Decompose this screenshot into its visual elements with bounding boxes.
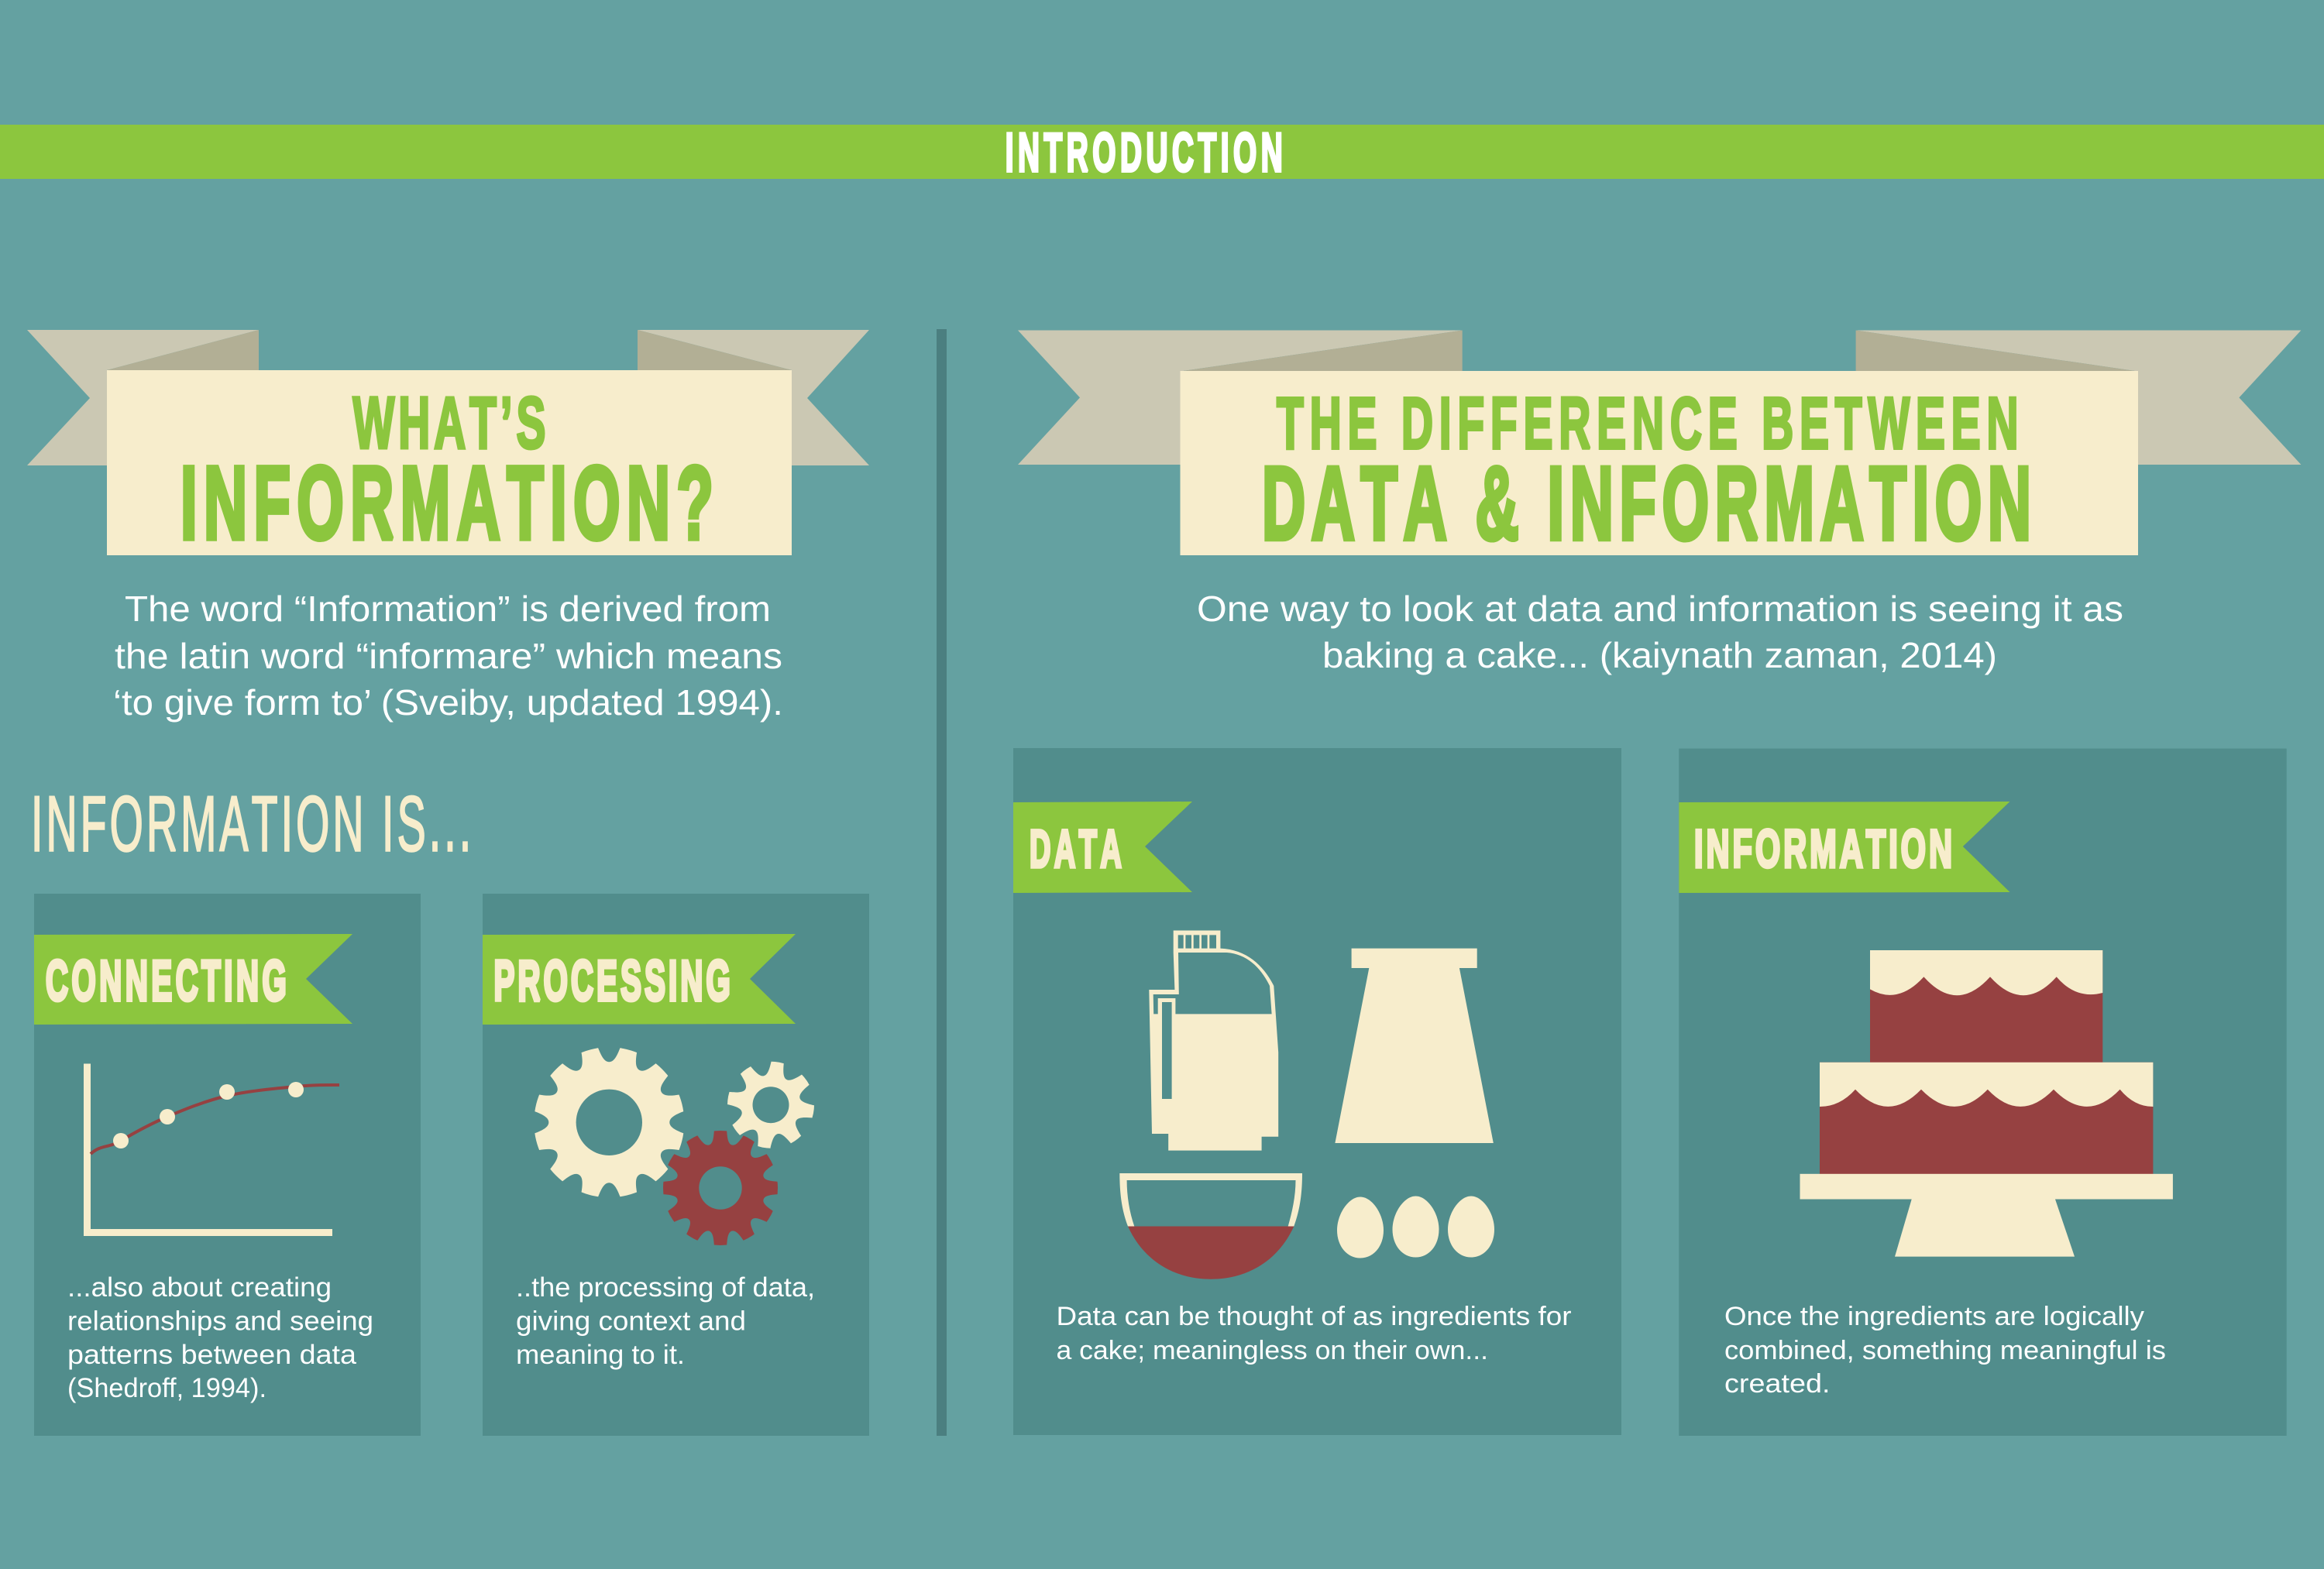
icon: flour bag	[1335, 949, 1494, 1143]
comparison intro paragraph	[1197, 589, 2123, 675]
gears icon	[534, 1047, 814, 1245]
icon: three eggs	[1337, 1196, 1494, 1258]
processing description: meaning to it.	[516, 1340, 685, 1370]
icon: two-tier cake	[1800, 950, 2173, 1257]
icon: mixing bowl	[1119, 1173, 1302, 1279]
ribbon label: information	[1679, 802, 2009, 893]
processing description: giving context and	[516, 1306, 746, 1337]
connecting description: (Shedroff, 1994).	[67, 1373, 266, 1403]
intro paragraph	[113, 589, 783, 723]
information description: combined, something meaningful is	[1724, 1336, 2166, 1365]
heading line: data and information: DATA & INFORMATION	[1262, 446, 2031, 561]
divider line between columns	[937, 329, 947, 1436]
information description: Once the ingredients are logically	[1724, 1302, 2144, 1331]
connecting description: patterns between data	[67, 1340, 357, 1370]
right column: data and information	[1013, 330, 2301, 1436]
ribbon label: information: INFORMATION	[1694, 819, 1952, 879]
intro paragraph: the latin word “informare” which means	[115, 636, 782, 676]
comparison intro paragraph: baking a cake... (kaiynath zaman, 2014)	[1322, 635, 1997, 675]
panel: connecting	[34, 894, 421, 1436]
subheading: information is: INFORMATION IS...	[31, 781, 471, 868]
ribbon label: connecting: CONNECTING	[46, 950, 287, 1013]
section banner: introduction	[0, 122, 2324, 184]
panel: processing	[483, 894, 869, 1436]
line chart icon	[84, 1064, 339, 1236]
data description: a cake; meaningless on their own...	[1057, 1336, 1488, 1365]
data description: Data can be thought of as ingredients for	[1057, 1302, 1571, 1331]
connecting description: relationships and seeing	[67, 1306, 373, 1337]
ribbon label: processing: PROCESSING	[494, 950, 731, 1013]
heading line: information: INFORMATION?	[180, 446, 713, 561]
data description	[1057, 1302, 1571, 1365]
processing description	[516, 1272, 815, 1370]
intro paragraph: ‘to give form to’ (Sveiby, updated 1994).	[113, 682, 783, 723]
banner title: INTRODUCTION	[1006, 122, 1283, 184]
connecting description	[67, 1272, 373, 1403]
heading line: the difference between: THE DIFFERENCE BETWEEN	[1277, 382, 2019, 465]
left column: what's information	[27, 330, 869, 1436]
connecting description: ...also about creating	[67, 1272, 332, 1303]
intro paragraph: The word “Information” is derived from	[125, 589, 771, 629]
ribbon heading: what's information	[27, 330, 869, 561]
panel: data	[1013, 748, 1621, 1435]
ribbon label: connecting	[34, 934, 352, 1025]
information description: created.	[1724, 1369, 1830, 1399]
information description	[1724, 1302, 2166, 1399]
icon: milk jug	[1149, 931, 1278, 1151]
ribbon label: data: DATA	[1030, 819, 1122, 878]
ribbon label: data	[1013, 802, 1192, 893]
panel: information	[1679, 749, 2287, 1436]
ribbon label: processing	[483, 934, 796, 1025]
comparison intro paragraph: One way to look at data and information is seeing it as	[1197, 589, 2123, 629]
processing description: ..the processing of data,	[516, 1272, 815, 1303]
ribbon heading: difference between data and information	[1018, 330, 2301, 561]
heading line: what's: WHAT’S	[353, 381, 546, 464]
